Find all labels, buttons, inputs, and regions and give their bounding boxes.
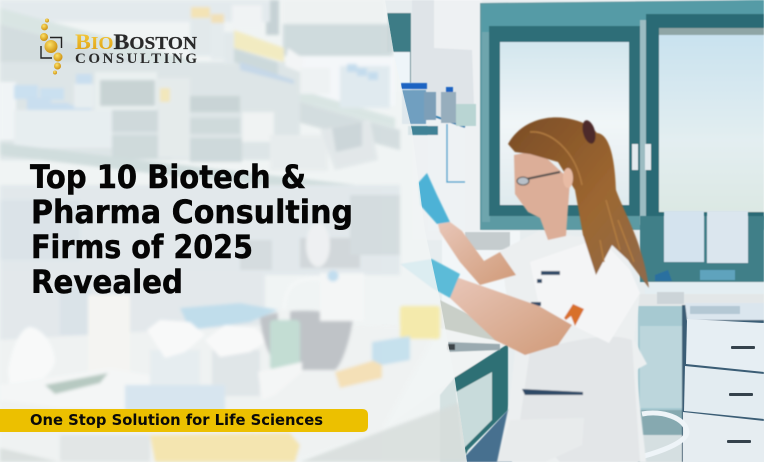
coat trims [522,271,583,395]
blue tube caps [180,303,278,330]
tube rack [258,361,304,378]
title [30,158,353,301]
stacked boxes on second shelf [95,72,378,171]
stool ring [618,413,687,462]
lower arm [450,277,572,355]
neck and face [514,150,570,240]
lower glove [400,259,460,298]
lab bench with equipment [382,231,520,462]
background: wall shelf, radiator and window lower section [638,211,764,462]
lab coat [497,231,647,462]
paper towel roll [88,294,130,336]
mid shelf items [0,185,400,340]
upper glove [418,173,450,224]
title: Pharma Consulting [31,193,353,231]
blue box [372,336,410,365]
bottles on top shelf [190,5,390,108]
tagline bar [0,409,368,432]
translucent overlay panel [0,0,467,462]
yellow block [400,306,440,339]
foil beakers [147,320,268,396]
ear [563,168,573,188]
hair [508,117,649,288]
title: Top 10 Biotech & [30,158,306,196]
counter front edge [0,400,467,462]
logo wordmark: BIOBOSTON [75,29,197,54]
circle sticker and white cylinder [320,270,364,321]
wash bottle [268,310,301,370]
cloth [10,327,52,381]
orange rack [335,358,382,388]
drawer cabinet [683,319,764,462]
lab shelves scene behind overlay [0,0,467,462]
logo mark [40,18,62,74]
pipette tip box [125,385,225,411]
background: shelf unit and bottles [401,83,476,231]
hair strands [530,132,634,262]
hair tie [580,119,598,145]
instrument box with green tray [46,372,108,394]
dark bowl [260,311,353,370]
upper background wall [1,0,394,57]
blue-cap jars on second shelf [0,74,113,148]
yellow tray [150,433,300,462]
middle shelf [1,144,346,186]
counter top [66,326,261,339]
title: Revealed [31,263,183,301]
top shelf [0,8,400,160]
logo subtitle: CONSULTING [75,51,197,67]
raised forearm [438,222,516,285]
logo [40,18,197,74]
grey instrument [60,435,150,462]
tagline bar: One Stop Solution for Life Sciences [30,411,323,429]
title: Firms of 2025 [31,228,253,266]
glasses [517,172,560,181]
woman scientist [400,117,649,462]
